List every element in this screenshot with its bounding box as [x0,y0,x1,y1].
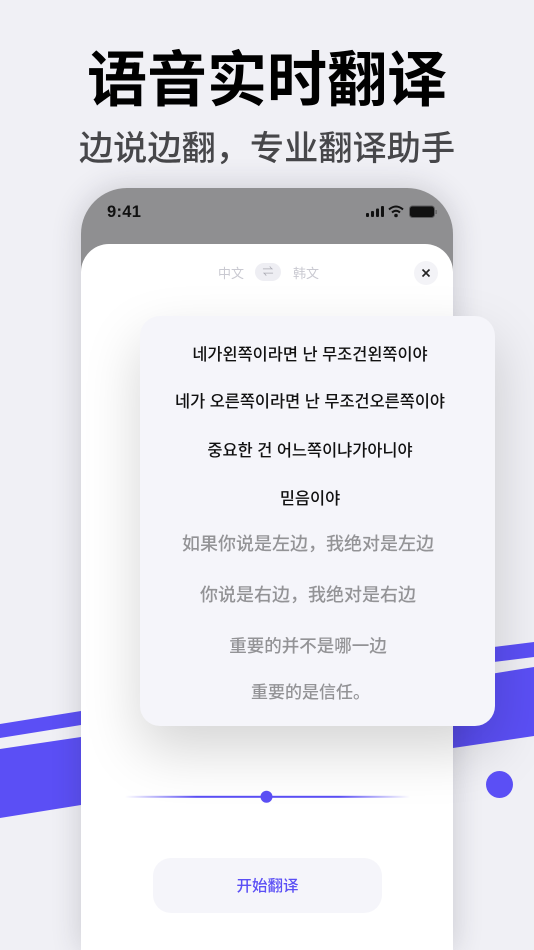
korean text block: 중요한 건 어느쪽이냐가아니야 [207,442,413,460]
chinese translation block [182,534,434,702]
start button: 开始翻译 [236,878,298,895]
decorative purple dot [486,771,513,798]
status bar time: 9:41 [107,203,141,221]
swap button [255,263,281,281]
app sheet [81,244,453,950]
waveform line [128,790,406,803]
close button [414,261,438,285]
source language: 中文 [218,266,244,281]
swap button: ⇌ [262,266,274,278]
subtitle: 边说边翻，专业翻译助手 [79,130,455,168]
korean text block [175,346,445,508]
korean text block: 네가 오른쪽이라면 난 무조건오른쪽이야 [175,393,445,411]
chinese translation block: 重要的是信任。 [251,683,370,702]
korean text block: 믿음이야 [280,490,340,508]
status bar icons [366,206,437,218]
korean text block: 네가왼쪽이라면 난 무조건왼쪽이야 [192,346,428,364]
start button [153,858,382,913]
chinese translation block: 你说是右边，我绝对是右边 [200,585,416,605]
phone frame [81,188,453,950]
translation card [140,316,495,726]
chinese translation block: 如果你说是左边，我绝对是左边 [182,534,434,554]
chinese translation block: 重要的并不是哪一边 [229,636,387,656]
title: 语音实时翻译 [87,47,447,114]
target language: 韩文 [293,266,319,281]
